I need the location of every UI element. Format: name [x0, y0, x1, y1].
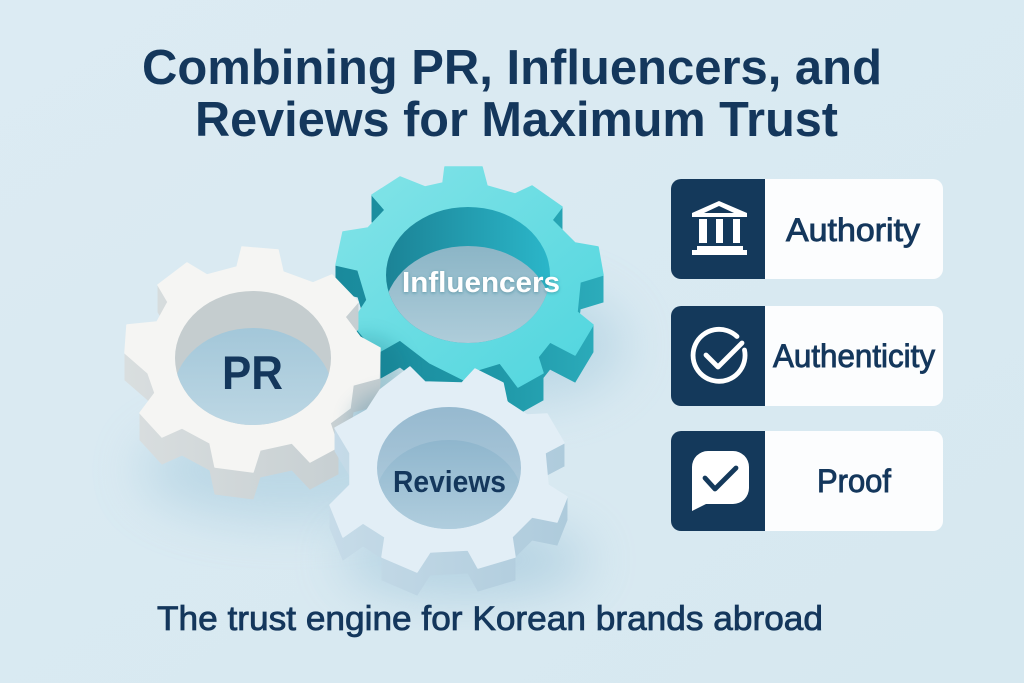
card: Proof [671, 431, 943, 531]
gear: Influencers [336, 167, 603, 414]
shadow of Reviews gear [350, 390, 450, 450]
icon: check in circle [693, 329, 745, 381]
label: Authority: Authority [786, 212, 920, 248]
gear shadows [140, 290, 625, 595]
label: PR: PR [222, 346, 283, 399]
title: Combining PR, Influencers, and [142, 41, 882, 95]
icon: speech bubble with check [692, 451, 749, 511]
card: Authority [671, 179, 943, 279]
card: Authenticity [671, 306, 943, 406]
label: Authenticity: Authenticity [773, 338, 935, 374]
label: Influencers: Influencers [402, 267, 560, 299]
shadow of PR gear on teal gear [325, 335, 405, 405]
subtitle: The trust engine for Korean brands abroad [157, 600, 823, 638]
title: Reviews for Maximum Trust [195, 93, 838, 147]
icon: bank building [692, 201, 747, 255]
label: Proof: Proof [817, 463, 891, 499]
gear: Reviews [330, 367, 567, 595]
label: Reviews: Reviews [393, 464, 506, 499]
title [142, 41, 882, 147]
gear: PR [125, 247, 380, 499]
